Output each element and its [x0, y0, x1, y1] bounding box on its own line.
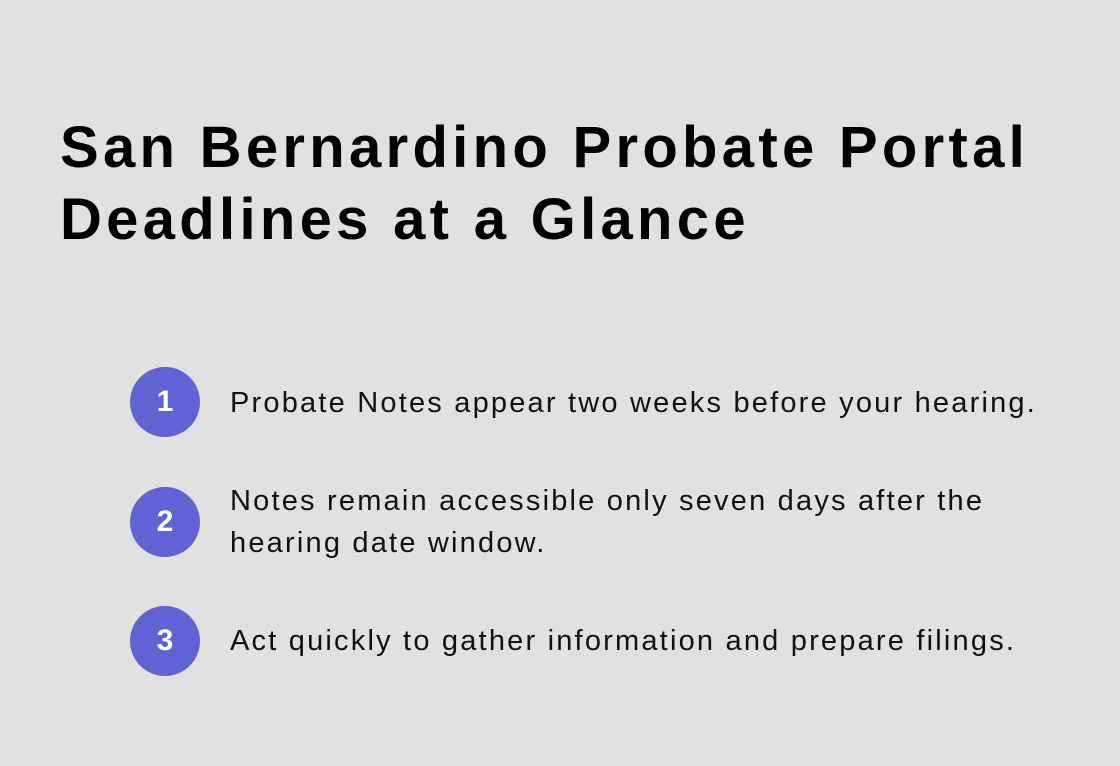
text 2: Notes remain accessible only seven days after the: [230, 485, 984, 517]
text 2: hearing date window.: [230, 527, 546, 559]
item 2: [130, 485, 984, 559]
item 1: [130, 367, 1037, 437]
title: Deadlines at a Glance: [60, 187, 750, 252]
icon: number 2: [130, 487, 200, 557]
title: [60, 115, 1029, 252]
item 3: [130, 606, 1016, 676]
text 1: Probate Notes appear two weeks before your hearing.: [230, 387, 1037, 419]
text 2: [230, 485, 984, 559]
title: San Bernardino Probate Portal: [60, 115, 1029, 180]
icon: number 3: [130, 606, 200, 676]
icon: number 1: [130, 367, 200, 437]
icon: number 2: 2: [157, 505, 173, 538]
text 3: Act quickly to gather information and prepare filings.: [230, 625, 1016, 657]
icon: number 3: 3: [157, 624, 173, 657]
icon: number 1: 1: [157, 385, 173, 418]
